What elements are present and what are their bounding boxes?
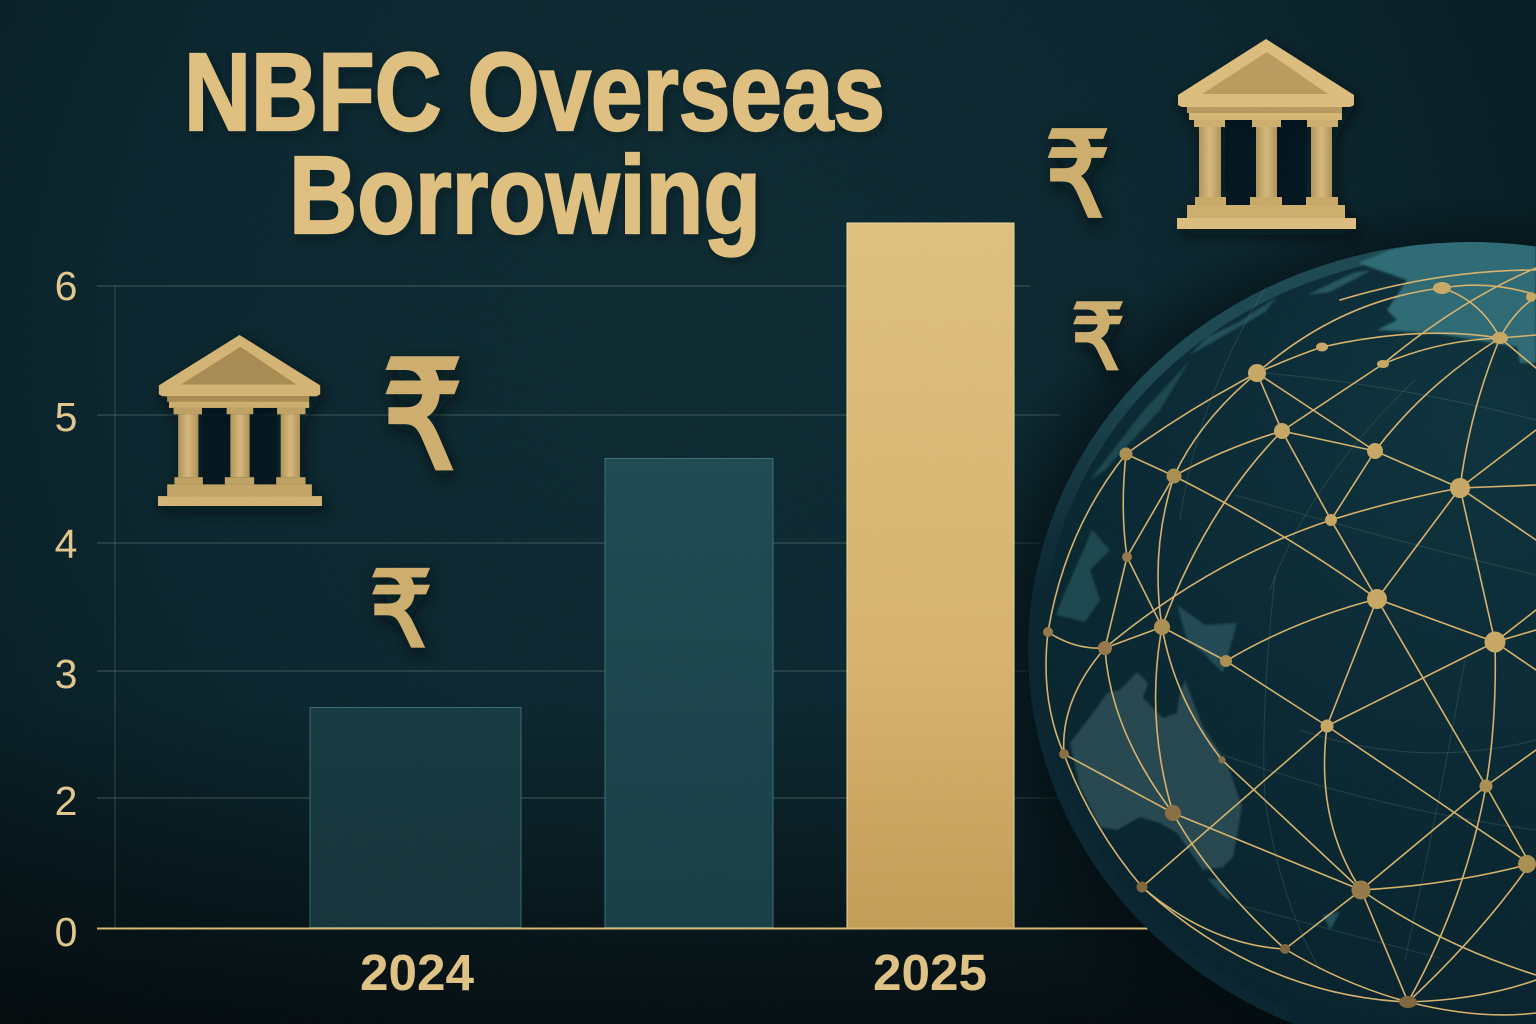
x label: 2024: 2024 — [360, 944, 475, 1001]
y axis and gridlines: 5 — [55, 394, 77, 440]
bar: middle — [605, 458, 773, 928]
globe body — [1028, 242, 1536, 1024]
icon: bank left — [158, 335, 322, 506]
lit rim arc — [1049, 247, 1399, 534]
y axis and gridlines — [55, 263, 1060, 955]
globe with network — [1028, 236, 1536, 1024]
y axis and gridlines: 0 — [55, 909, 77, 955]
lower vignette — [0, 700, 1536, 1024]
network nodes — [1043, 282, 1536, 1008]
x label: 2025: 2025 — [873, 944, 987, 1001]
title — [184, 31, 885, 257]
network links — [1046, 268, 1536, 1015]
bar: 2025 — [847, 223, 1014, 928]
globe shadow — [945, 195, 1536, 1024]
icon: rupee lower right: ₹ — [1071, 287, 1125, 389]
icon: rupee top right: ₹ — [1045, 110, 1110, 242]
faint graticule — [1180, 250, 1536, 970]
icon: bank top right — [1177, 39, 1356, 229]
icon: rupee large left: ₹ — [382, 333, 463, 500]
y axis and gridlines: 6 — [55, 263, 77, 309]
x axis line — [97, 928, 1150, 930]
y axis and gridlines: 3 — [55, 651, 77, 697]
icon: rupee small left: ₹ — [369, 551, 433, 669]
title: Borrowing — [289, 134, 761, 257]
globe rim — [1028, 644, 1284, 1020]
continents — [1056, 236, 1536, 930]
title: NBFC Overseas — [184, 31, 885, 154]
bar: 2024 — [310, 708, 521, 928]
y axis and gridlines: 2 — [55, 778, 77, 824]
y axis and gridlines: 4 — [55, 521, 77, 567]
